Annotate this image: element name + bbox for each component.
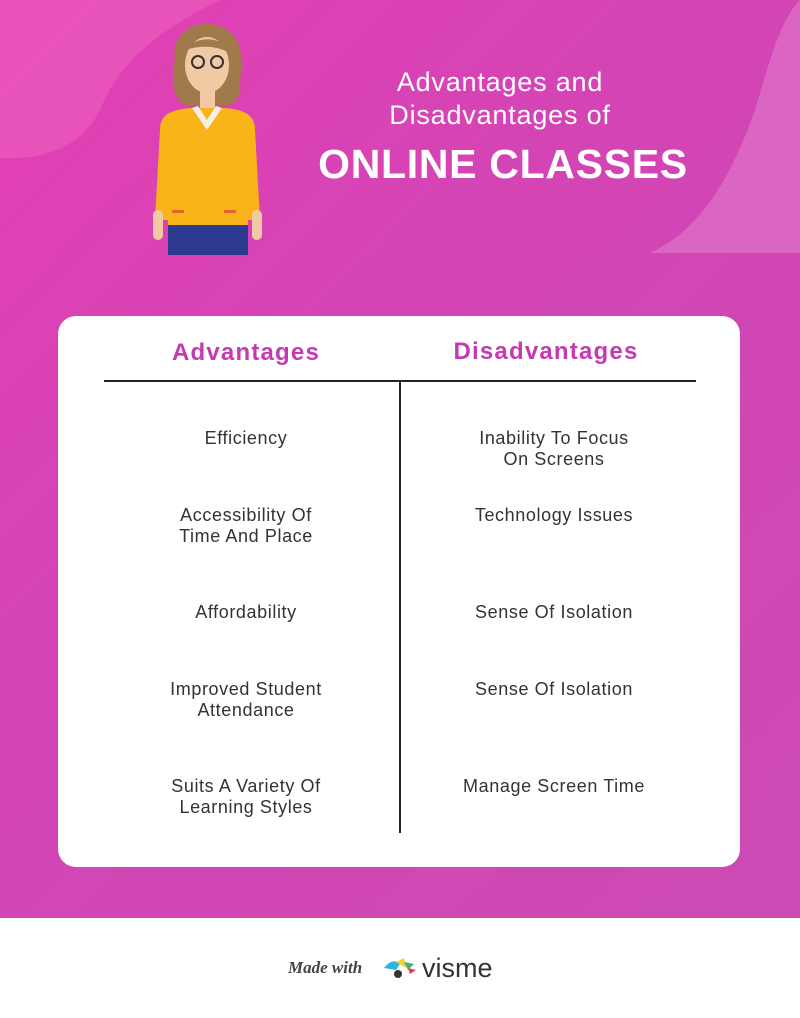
advantages list: Time And Place xyxy=(179,526,313,546)
advantages list: Affordability xyxy=(195,602,297,622)
title: Advantages and xyxy=(397,67,603,97)
advantages list: Accessibility Of xyxy=(180,505,312,525)
heading: advantages: Advantages xyxy=(172,339,320,366)
illustration: woman xyxy=(153,24,262,255)
footer: made with visme xyxy=(288,953,493,983)
title xyxy=(318,67,688,187)
footer: made with visme: Made with xyxy=(288,958,362,977)
disadvantages list: Technology Issues xyxy=(475,505,633,525)
disadvantages list: Sense Of Isolation xyxy=(475,679,633,699)
disadvantages list: Sense Of Isolation xyxy=(475,602,633,622)
advantages list: Attendance xyxy=(197,700,295,720)
advantages list: Suits A Variety Of xyxy=(171,776,321,796)
disadvantages list xyxy=(463,428,645,796)
heading: disadvantages: Disadvantages xyxy=(453,338,638,365)
panel: comparison table xyxy=(58,316,740,867)
advantages list: Improved Student xyxy=(170,679,322,699)
title: Disadvantages of xyxy=(389,100,611,130)
disadvantages list: Inability To Focus xyxy=(479,428,629,448)
title: ONLINE CLASSES xyxy=(318,141,688,187)
advantages list: Learning Styles xyxy=(179,797,313,817)
footer: made with visme: visme xyxy=(422,953,493,983)
disadvantages list: Manage Screen Time xyxy=(463,776,645,796)
advantages list: Efficiency xyxy=(205,428,287,448)
disadvantages list: On Screens xyxy=(503,449,605,469)
advantages list xyxy=(170,428,322,817)
